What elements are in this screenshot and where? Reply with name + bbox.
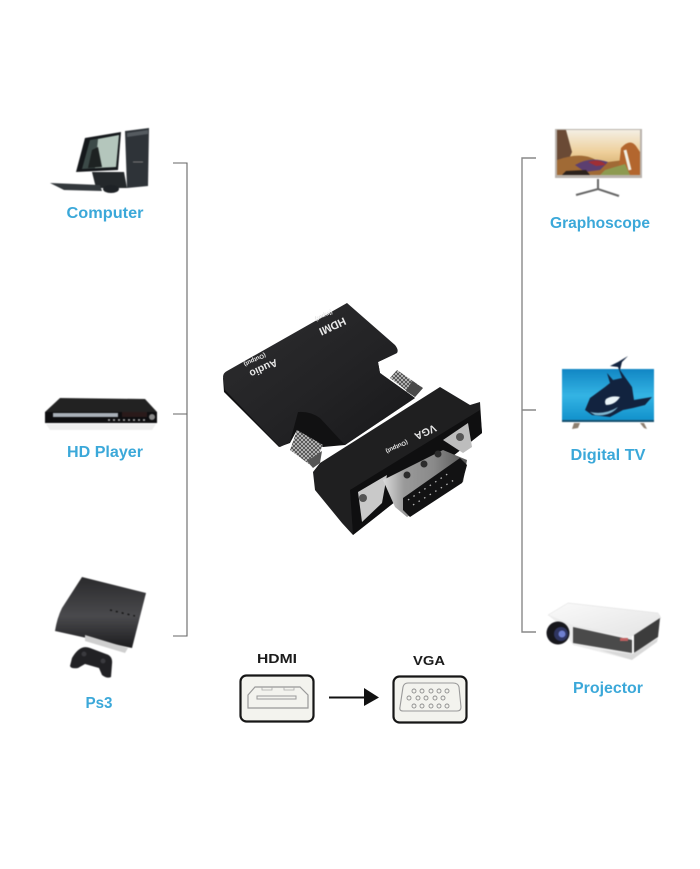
VGA housing (313, 387, 482, 535)
metal plate left end (358, 475, 387, 522)
game controller (70, 647, 112, 678)
label: Graphoscope: Graphoscope (550, 215, 650, 232)
printed text: VGA (Output): (Output) (384, 438, 408, 454)
device: projector (546, 603, 661, 660)
device: graphoscope monitor (555, 129, 642, 196)
right connector bracket (522, 158, 536, 632)
device: HD player (45, 398, 157, 430)
label: Ps3: Ps3 (86, 695, 113, 712)
label: Projector: Projector (573, 680, 643, 697)
printed text: VGA (Output) (384, 421, 438, 454)
label: Digital TV: Digital TV (570, 447, 646, 464)
mouse (103, 185, 119, 193)
left connector bracket (173, 163, 187, 636)
icon: VGA port (394, 676, 466, 722)
label: Computer: Computer (66, 205, 144, 222)
VGA connector face (403, 458, 467, 517)
icon: HDMI port (240, 676, 314, 722)
VGA connector shell (383, 450, 467, 517)
left thumbscrew (290, 430, 323, 468)
printed text: HDMI (Input): HDMI (317, 314, 348, 337)
printed text: VGA (Output): VGA (412, 421, 438, 442)
VGA housing front face (350, 410, 482, 535)
printed text: HDMI (Input): (Input) (314, 308, 333, 322)
keyboard (50, 183, 102, 191)
metal plate right end (443, 423, 472, 453)
adapter body side walls (223, 353, 415, 447)
right thumbscrew (390, 370, 423, 397)
monitor (76, 132, 127, 188)
adapter body top face (223, 303, 415, 447)
tower case (125, 128, 149, 188)
device: computer (50, 128, 149, 193)
heading: HDMI: HDMI (257, 651, 297, 666)
printed text: Audio (Output): Audio (247, 356, 279, 379)
heading: VGA: VGA (413, 653, 446, 668)
HDMI to VGA adapter photo (223, 303, 482, 535)
orca (585, 356, 652, 417)
projector lens (546, 622, 570, 644)
device: digital TV (562, 356, 654, 429)
printed text: Audio (Output): (Output) (242, 351, 266, 367)
label: HD Player: HD Player (67, 444, 143, 461)
arrow: HDMI to VGA (329, 688, 379, 706)
device: Ps3 console (55, 577, 146, 678)
